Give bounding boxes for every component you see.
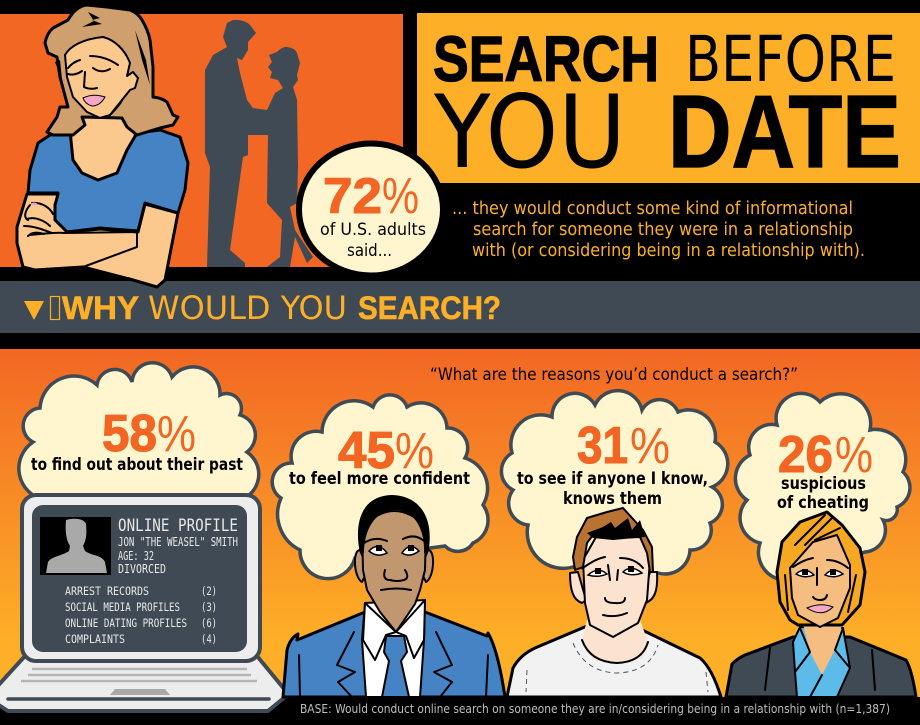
statement line 1: ... they would conduct some kind of informational	[452, 199, 853, 219]
icon: down triangle	[24, 301, 44, 320]
laptop front edge	[8, 697, 269, 701]
icon: empty glyph box	[50, 296, 60, 320]
irises	[595, 566, 634, 574]
circle	[299, 144, 443, 276]
text block: survey statement	[452, 199, 865, 261]
hair spikes	[587, 518, 645, 540]
record row: social media: SOCIAL MEDIA PROFILES	[65, 600, 180, 614]
footer band	[0, 697, 920, 725]
heading words WOULD YOU: WOULD YOU	[148, 289, 347, 327]
survey question: “What are the reasons you’d conduct a search?”	[430, 365, 798, 384]
brows, nose, mouth	[583, 557, 643, 616]
tie	[382, 636, 409, 697]
caption line 1: to see if anyone I know,	[517, 469, 708, 488]
jacket	[726, 637, 916, 697]
percent sign: %	[157, 405, 196, 462]
face	[790, 535, 850, 627]
statement line 3: with (or considering being in a relationship with).	[472, 241, 865, 261]
eyes	[369, 546, 419, 555]
lapels	[299, 632, 488, 697]
record count: social: (3)	[201, 600, 217, 614]
illustration: laptop with online profile	[0, 495, 285, 711]
panel: title background	[417, 13, 920, 183]
caption: to feel more confident	[289, 469, 470, 488]
blouse collar lines	[765, 628, 875, 697]
thought cloud: 45%	[272, 395, 488, 579]
record row: online dating: ONLINE DATING PROFILES	[65, 616, 187, 630]
heading word WHY: WHY	[62, 290, 139, 326]
percent sign: %	[382, 167, 419, 224]
cloud shape	[501, 391, 728, 574]
illustration: man in blue suit	[283, 495, 505, 697]
title	[433, 23, 901, 191]
lips	[807, 605, 833, 613]
percent sign: %	[395, 422, 434, 479]
collar	[363, 600, 425, 660]
profile photo frame	[40, 517, 111, 575]
collar line	[582, 640, 648, 663]
shirt	[362, 600, 425, 697]
woman neck and chest	[70, 105, 137, 190]
woman face	[65, 37, 138, 118]
circle caption line 1: of U.S. adults	[320, 220, 426, 239]
tee stitching	[526, 643, 708, 692]
illustration: blonde woman in dark jacket	[726, 512, 916, 697]
jacket	[283, 612, 505, 697]
title line 2 first word: YOU	[433, 73, 626, 191]
72 number: 72	[323, 168, 382, 224]
ears	[355, 550, 433, 582]
26 number: 26	[778, 426, 833, 484]
hair	[777, 512, 865, 625]
laptop screen bezel	[22, 495, 260, 661]
profile name: JON "THE WEASEL" SMITH	[118, 535, 238, 549]
icon: couple silhouette	[205, 20, 313, 267]
percent sign: %	[630, 417, 670, 474]
record row: complaints: COMPLAINTS	[65, 632, 125, 646]
woman hair shading	[55, 12, 150, 85]
t-shirt	[507, 626, 721, 697]
irises	[802, 569, 836, 575]
woman shirt	[28, 130, 188, 232]
brows, nose, mouth	[364, 536, 424, 590]
record count: dating: (6)	[201, 616, 217, 630]
panel: section heading band	[0, 281, 920, 333]
circle caption line 2: said...	[347, 241, 392, 260]
eyes	[796, 570, 843, 577]
woman hair	[45, 5, 178, 135]
woman lips	[83, 95, 105, 106]
cloud shape	[735, 393, 910, 580]
illustration: young man in white t-shirt	[507, 508, 721, 697]
profile status: DIVORCED	[118, 562, 166, 576]
brows and nose	[793, 558, 848, 600]
neck and face	[362, 511, 426, 632]
woman arm lines and hand	[24, 203, 140, 282]
hair	[573, 508, 653, 572]
woman fingernail	[31, 202, 37, 206]
record row: arrest records: ARREST RECORDS	[65, 584, 149, 598]
eyes	[588, 568, 642, 576]
section heading	[24, 289, 501, 327]
icon: woman with crossed arms	[17, 5, 188, 287]
face	[583, 530, 650, 637]
profile heading: ONLINE PROFILE	[118, 516, 238, 536]
thought cloud: 26%	[735, 393, 910, 580]
laptop screen	[32, 505, 247, 652]
hair	[358, 495, 430, 553]
45 number: 45	[338, 422, 395, 480]
laptop base	[0, 656, 285, 711]
record count: arrest: (2)	[201, 584, 217, 598]
profile photo silhouette	[46, 519, 107, 573]
heading word SEARCH: SEARCH?	[358, 290, 501, 326]
blouse	[793, 627, 850, 697]
touchpad	[110, 689, 170, 695]
thought cloud: 58%	[19, 363, 259, 500]
caption line 2: knows them	[563, 489, 662, 508]
neck skin	[802, 620, 842, 675]
profile age: AGE: 32	[118, 549, 154, 563]
keyboard lines	[21, 669, 257, 681]
percent sign: %	[835, 426, 873, 483]
ears	[570, 572, 657, 603]
panel: orange hero background	[0, 14, 403, 267]
caption: to find out about their past	[31, 455, 243, 474]
statement line 2: search for someone they were in a relationship	[473, 220, 853, 240]
cloud shape	[272, 395, 488, 579]
31 number: 31	[577, 417, 628, 475]
irises	[376, 545, 414, 551]
callout: 72% circle	[299, 144, 443, 276]
caption line 2: of cheating	[777, 493, 869, 512]
record count: complaints: (4)	[201, 632, 217, 646]
woman facial features	[68, 56, 122, 115]
caption line 1: suspicious	[781, 474, 866, 493]
title line 1 first word: SEARCH	[433, 23, 659, 95]
neck	[582, 620, 648, 663]
58 number: 58	[102, 405, 157, 463]
hair strands	[785, 515, 856, 612]
cloud shape	[19, 363, 259, 500]
panel: reasons gradient background	[0, 349, 920, 697]
woman arms	[17, 194, 178, 287]
thought cloud: 31%	[501, 391, 728, 574]
